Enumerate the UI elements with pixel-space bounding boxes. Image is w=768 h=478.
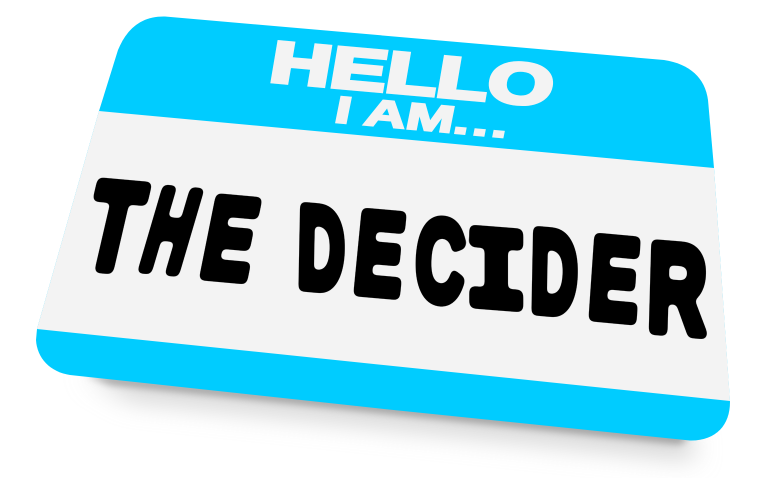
handwritten text: THE DECIDER: T [74, 158, 154, 297]
white writing area [37, 111, 730, 401]
handwritten text: THE DECIDER: E [350, 188, 410, 320]
handwritten text: THE DECIDER: I [466, 211, 526, 342]
handwritten text: THE DECIDER: E [193, 175, 267, 304]
handwritten text: THE DECIDER: D [297, 181, 346, 315]
handwritten text: THE DECIDER: D [530, 205, 579, 339]
subheading: I AM...: I AM... [331, 89, 516, 146]
handwritten text: THE DECIDER: R [646, 219, 708, 361]
handwritten text: THE DECIDER [74, 158, 708, 361]
handwritten text: THE DECIDER: H [130, 166, 212, 297]
heading: HELLO: HELLO [266, 30, 559, 119]
card shadow [85, 372, 695, 458]
handwritten text: THE DECIDER: C [413, 195, 468, 327]
handwritten text: THE DECIDER: E [585, 214, 643, 345]
